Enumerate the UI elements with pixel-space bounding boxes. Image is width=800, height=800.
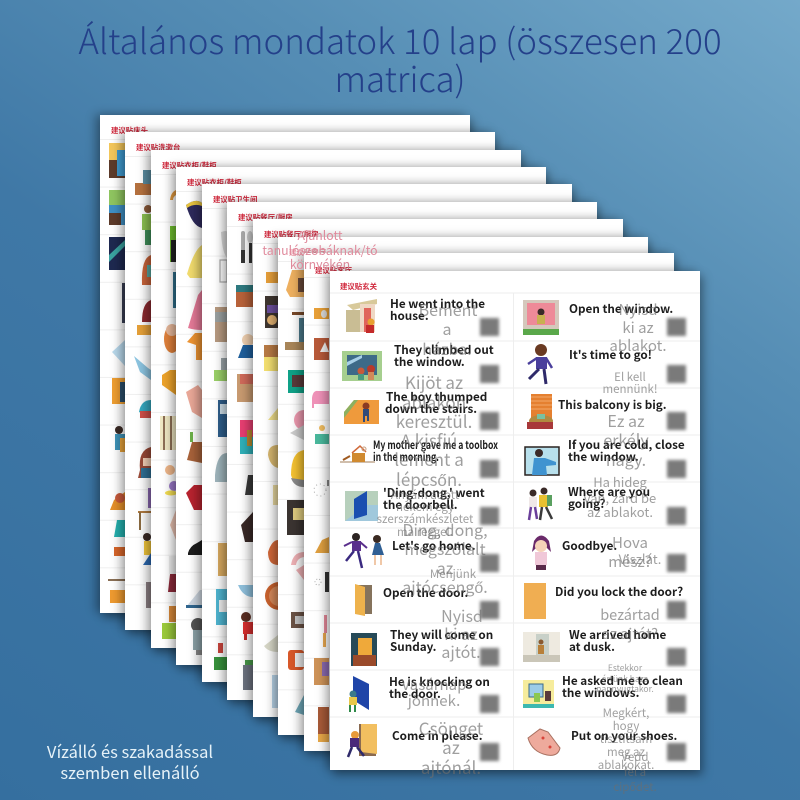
sheet 2 icon strip xyxy=(134,170,151,608)
sticker sheet 8: living room xyxy=(278,237,648,735)
Hungarian translations, grey overlay: jönnek. xyxy=(407,690,460,711)
English sentences, right column: We arrived home xyxy=(569,626,666,643)
sheet 2 heading: 建议贴洗漱台 xyxy=(136,142,180,153)
English sentences, left column: Sunday. xyxy=(390,638,436,655)
Hungarian translations, grey overlay: Ez az xyxy=(607,408,645,432)
Hungarian translations, grey overlay: Estekkor xyxy=(608,662,643,674)
sticker sheet 5: bathroom xyxy=(202,184,572,682)
icon: running boy xyxy=(528,344,552,384)
English sentences, right column: Did you lock the door? xyxy=(555,583,683,600)
icon: knocking xyxy=(349,676,369,712)
English sentences, right column: It's time to go! xyxy=(569,346,652,363)
English sentences, left column: The boy thumped xyxy=(386,388,487,405)
icon: toolbox xyxy=(340,446,375,462)
Hungarian translations, grey overlay: Menjünk xyxy=(430,566,477,582)
Hungarian translations, grey overlay: értünk haza xyxy=(602,673,649,685)
sheet 8 heading: 建议贴客厅 xyxy=(289,247,326,258)
Hungarian translations, grey overlay: Anyám adott xyxy=(391,487,460,503)
sheet 4 icon strip xyxy=(186,200,202,655)
sheet 8 icon strip xyxy=(285,270,304,715)
Hungarian translations, grey overlay: El kell xyxy=(614,369,646,385)
Hungarian translations, grey overlay: a xyxy=(442,316,452,340)
Hungarian translations, grey overlay: szerszámkészletet xyxy=(377,511,474,527)
Hungarian translations, grey overlay: ki az xyxy=(444,621,478,645)
sticker sheet 4: wardrobe and shoe cabinet xyxy=(176,167,546,665)
English sentences, left column: 'Ding-dong,' went xyxy=(383,484,485,501)
Hungarian translations, grey overlay: Nyisd xyxy=(441,603,483,627)
English sentences, left column: down the stairs. xyxy=(385,400,477,417)
sticker sheet 1: bedside xyxy=(100,115,470,613)
Hungarian translations, grey overlay: bezártad xyxy=(600,604,660,625)
Hungarian translations, grey overlay: fel a xyxy=(624,764,646,780)
Hungarian translations, grey overlay: Hova xyxy=(612,532,648,553)
Hungarian translations, grey overlay: Kijöt az xyxy=(405,369,463,394)
sticker sheet 6: dining room and kitchen xyxy=(227,202,597,700)
sheet 3 icon strip xyxy=(160,190,176,639)
icon: open door xyxy=(355,584,372,616)
Hungarian translations, grey overlay: A kisfiú xyxy=(401,427,457,452)
Hungarian translations, grey overlay: mennünk! xyxy=(602,381,658,397)
icon: pink shoes xyxy=(528,729,560,755)
English sentences, left column: He is knocking on xyxy=(389,673,490,690)
Hungarian translations, grey overlay: ajtót. xyxy=(441,639,481,663)
sheet 5 icon strip xyxy=(214,231,227,670)
caption: waterproof note: Vízálló és szakadással xyxy=(47,739,213,763)
pink overlay note: környékén xyxy=(290,255,350,273)
Hungarian translations, grey overlay: keresztül. xyxy=(396,408,472,433)
English sentences, left column: the door. xyxy=(389,685,441,702)
Hungarian translations, grey overlay: megszólalt xyxy=(404,536,486,560)
sheet 1 heading: 建议贴床头 xyxy=(111,125,148,136)
icon: cleaning windows xyxy=(523,680,554,708)
English sentences, left column: My mother gave me a toolbox xyxy=(373,437,498,453)
Hungarian translations, grey overlay: nekem egy xyxy=(396,499,454,515)
Hungarian translations, grey overlay: az xyxy=(437,555,454,579)
icon: closing the window xyxy=(525,447,559,475)
sheet 6 heading: 建议贴餐厅/厨房 xyxy=(238,212,293,223)
Hungarian translations, grey overlay: Vedd xyxy=(621,749,649,765)
QR placeholders xyxy=(480,318,686,761)
Hungarian translations, grey overlay: napnyugtakor. xyxy=(596,683,654,695)
Hungarian translations, grey overlay: Bement xyxy=(419,297,477,321)
icon: sunday visitors xyxy=(351,633,377,666)
English sentences, right column: This balcony is big. xyxy=(558,396,667,413)
Hungarian translations, grey overlay: cipődet. xyxy=(613,779,657,795)
sheet 4 heading: 建议贴衣柜/鞋柜 xyxy=(187,177,242,188)
icon: home at dusk xyxy=(523,632,560,662)
sheet 7 icon strip xyxy=(264,272,278,708)
sheet 3 heading: 建议贴衣柜/鞋柜 xyxy=(162,160,217,171)
Hungarian translations, grey overlay: lépcsőn. xyxy=(396,466,462,491)
sheet 9 icon strip xyxy=(312,308,329,742)
English sentences, right column: Open the window. xyxy=(569,300,673,317)
Hungarian translations, grey overlay: házba. xyxy=(422,336,472,360)
English sentences, right column: at dusk. xyxy=(569,638,615,655)
Hungarian translations, grey overlay: van, zárd be xyxy=(584,488,656,507)
icon: two hikers xyxy=(529,488,552,520)
icon: open window girl xyxy=(523,300,559,335)
Hungarian translations, grey overlay: ablakokat. xyxy=(598,757,654,773)
sheet 9 heading: 建议贴客厅 xyxy=(315,265,352,276)
English sentences, left column: He went into the xyxy=(390,295,485,312)
Hungarian translations, grey overlay: Csönget xyxy=(419,715,484,740)
English sentences, right column: Where are you xyxy=(568,483,650,500)
Hungarian translations, grey overlay: tisztítsam xyxy=(600,731,652,747)
title xyxy=(78,15,722,103)
sheet 7 heading: 建议贴餐厅/厨房 xyxy=(264,229,319,240)
English sentences, right column: the windows. xyxy=(562,684,639,701)
title: Általános mondatok 10 lap (összesen 200 xyxy=(78,15,722,65)
Hungarian translations, grey overlay: nagy. xyxy=(606,447,646,471)
icon: balcony xyxy=(527,394,553,429)
Hungarian translations, grey overlay: ki az xyxy=(622,317,654,338)
Hungarian translations, grey overlay: erkély xyxy=(603,427,649,451)
icon: come in xyxy=(348,724,377,757)
icon: climbing out the window xyxy=(342,351,382,381)
Hungarian translations, grey overlay: ajtócsengő. xyxy=(402,574,488,598)
icon: doorbell door xyxy=(345,491,378,521)
Hungarian translations, grey overlay: meg az xyxy=(607,744,645,760)
sheet 5 heading: 建议贴卫生间 xyxy=(213,194,257,205)
caption: waterproof note xyxy=(46,739,213,784)
Hungarian translations, grey overlay: Ha hideg xyxy=(593,472,647,491)
pink overlay note: Ajánlott xyxy=(298,226,342,244)
English sentences, right column: Goodbye. xyxy=(562,537,617,554)
English sentences, right column xyxy=(555,300,685,744)
Hungarian translations, grey overlay: ablakot. xyxy=(609,335,667,356)
front sheet content xyxy=(330,292,700,770)
English sentences, left column: Come in please. xyxy=(392,727,483,744)
front sheet heading: 建议贴玄关 xyxy=(340,281,377,292)
English sentences, left column: Let's go home. xyxy=(392,537,476,554)
English sentences, right column: If you are cold, close xyxy=(568,436,685,453)
Hungarian translations, grey overlay: ma reggel. xyxy=(397,524,453,540)
icon: stairs xyxy=(344,400,379,424)
sticker sheet 3: wardrobe xyxy=(151,150,521,648)
Hungarian translations, grey overlay: az xyxy=(442,734,460,759)
Hungarian translations, grey overlay: Viszlát. xyxy=(619,549,661,568)
Hungarian translations, grey overlay: Ding, dong, xyxy=(402,517,488,541)
English sentences, left column: house. xyxy=(390,307,429,324)
English sentences, right column: the window. xyxy=(568,448,639,465)
English sentences, left column: in the morning. xyxy=(373,449,439,465)
icon: closed door xyxy=(524,583,546,619)
pink overlay note: tanulószobáknak/tó xyxy=(262,240,378,258)
English sentences, right column: Put on your shoes. xyxy=(571,727,677,744)
English sentences, left column xyxy=(373,295,498,744)
Hungarian translations, grey overlay: ajtónál. xyxy=(421,754,481,779)
English sentences, left column: Open the door. xyxy=(383,584,468,601)
Hungarian translations, grey overlay: hogy xyxy=(613,718,639,734)
icon: waving girl xyxy=(532,536,551,570)
pink overlay note xyxy=(262,226,378,273)
Hungarian translations, grey overlay: mész? xyxy=(608,551,652,572)
sheet 1 icon strip xyxy=(108,143,125,603)
English sentences, left column: the window. xyxy=(394,353,465,370)
icon: house xyxy=(346,299,377,333)
English sentences, right column: going? xyxy=(568,495,606,512)
sticker sheet 7: dining room and kitchen xyxy=(253,219,623,717)
sheet 6 icon strip xyxy=(236,231,253,690)
Hungarian translations, grey overlay: Vasárnap xyxy=(402,674,466,695)
sticker sheet 9: living room xyxy=(304,253,674,751)
Hungarian translations, grey overlay: az ablakot. xyxy=(587,502,653,521)
Hungarian translations, grey overlay: az ajtót? xyxy=(602,623,658,644)
icon: two children going home xyxy=(344,533,384,568)
Hungarian translations, grey overlay: Nyisd xyxy=(618,299,658,320)
sticker sheet 2: washstand xyxy=(125,132,495,630)
front sticker sheet: entrance xyxy=(330,271,700,770)
English sentences, left column: They climbed out xyxy=(394,341,494,358)
Hungarian translations, grey overlay: Megkért, xyxy=(603,705,649,721)
English sentences, left column: the doorbell. xyxy=(383,496,458,513)
caption: waterproof note: szemben ellenálló xyxy=(60,760,200,784)
English sentences, right column: He asked me to clean xyxy=(562,672,683,689)
title: matrica) xyxy=(334,53,466,103)
English sentences, left column: They will come on xyxy=(390,626,493,643)
Hungarian translations, grey overlay: ablakon xyxy=(402,389,466,414)
Hungarian translations, grey overlay: lement a xyxy=(394,446,464,471)
